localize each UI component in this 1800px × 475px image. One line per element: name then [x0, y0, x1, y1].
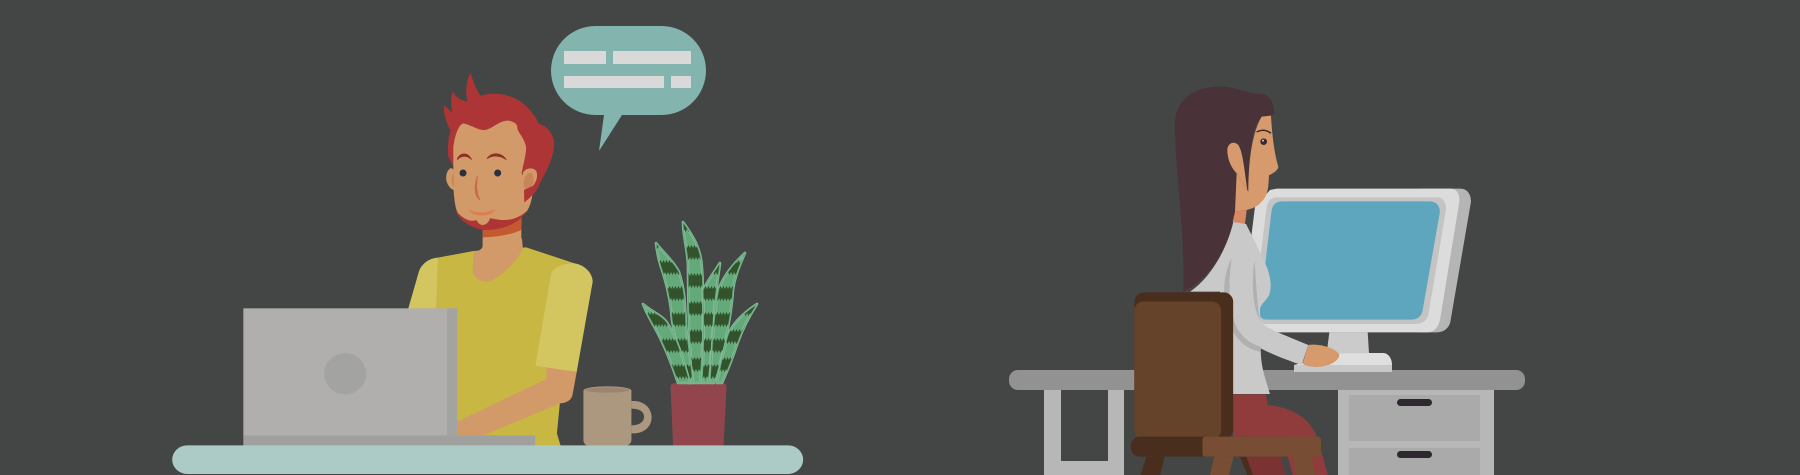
woman, monitor: [1175, 87, 1471, 475]
ear: [1227, 143, 1247, 190]
yellow shirt: [408, 247, 575, 446]
desk: [1009, 370, 1525, 475]
neck: [1233, 210, 1247, 224]
neckline skin: [473, 238, 523, 282]
monitor base: [1294, 353, 1392, 372]
hand: [1303, 345, 1339, 367]
white blouse: [1190, 222, 1308, 394]
plant pot: [671, 383, 727, 446]
right sleeve: [535, 263, 593, 372]
speech bubble: [551, 26, 706, 151]
forearm: [457, 367, 577, 435]
coffee mug: [583, 386, 652, 446]
pants: [1233, 394, 1328, 475]
man: torso and arm, laptop, table, mug and pot: [172, 238, 803, 474]
long hair: [1175, 87, 1274, 292]
scene: woman at desktop computer: [1009, 87, 1525, 475]
laptop: [243, 308, 535, 446]
scene: man at laptop: [172, 26, 803, 474]
monitor stand: [1327, 332, 1369, 353]
snake plant: [643, 222, 757, 383]
monitor: [1252, 189, 1471, 332]
chair: [1131, 292, 1321, 475]
man: head and neck: [444, 72, 554, 255]
eye and brow: [1257, 130, 1271, 145]
blouse folds: [1224, 258, 1261, 352]
left sleeve: [408, 258, 438, 308]
face: [1235, 116, 1278, 212]
table top: [172, 445, 803, 474]
